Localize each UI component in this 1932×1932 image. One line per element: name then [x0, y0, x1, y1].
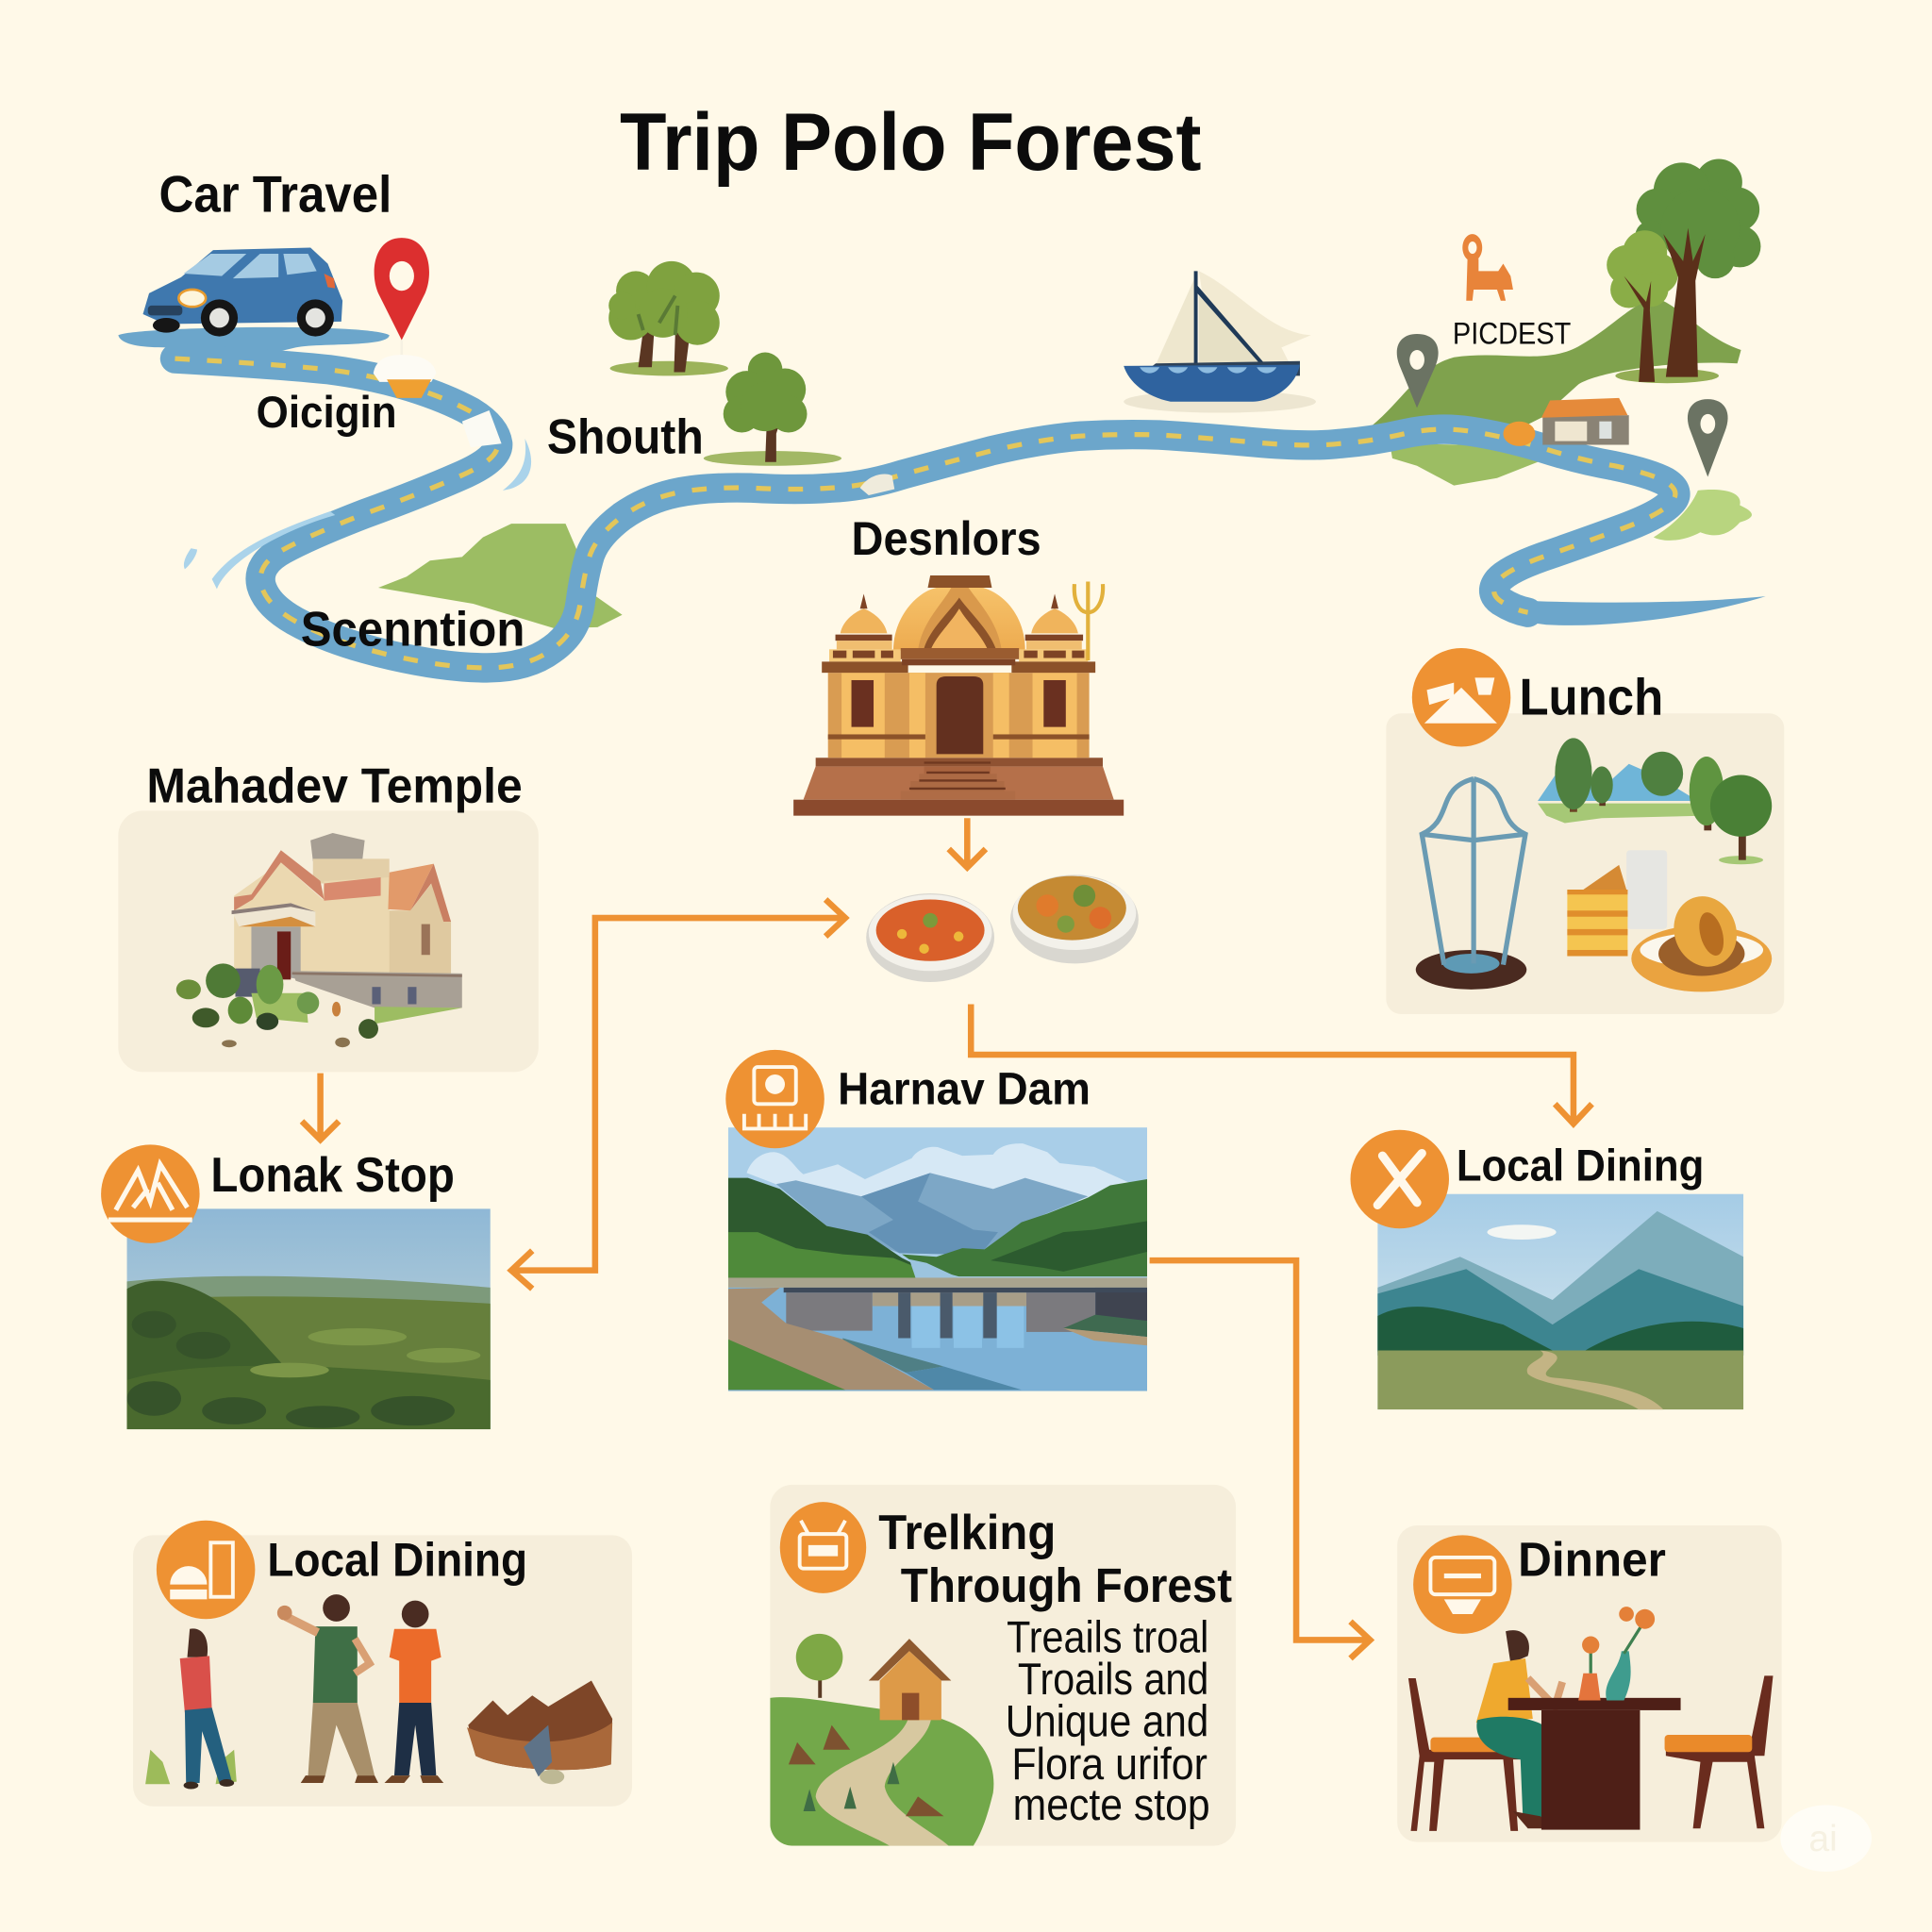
chair left — [1408, 1678, 1525, 1831]
icon: small cabin — [1541, 398, 1629, 445]
arrow: temple to food — [949, 818, 986, 868]
icon: orange mountain badge — [101, 1144, 200, 1243]
roofs — [234, 850, 325, 910]
heading: Local Dining: Local Dining — [1457, 1140, 1704, 1190]
road markers: cup, bag and bridge — [374, 340, 1535, 495]
icon: two food bowls — [866, 874, 1139, 982]
illustration: sack of rocks — [467, 1681, 612, 1784]
description text: Flora urifor — [1011, 1739, 1208, 1789]
road tail — [1497, 596, 1766, 625]
icon: orange dining badge — [157, 1521, 255, 1619]
water — [728, 1288, 1147, 1391]
title: Trip Polo Forest — [620, 97, 1201, 188]
watermark badge: ai — [1808, 1819, 1838, 1859]
side domes — [841, 608, 1078, 633]
icon: sailboat — [1124, 271, 1316, 413]
hill: light green blob — [1654, 490, 1752, 541]
trident — [1074, 581, 1103, 660]
arrow: double headed connector — [511, 899, 845, 1289]
steps — [924, 766, 991, 774]
icon: orange trek badge — [780, 1502, 866, 1593]
clouds — [747, 1143, 1132, 1201]
icon: red location pin — [375, 238, 429, 340]
person — [1506, 1630, 1529, 1663]
label: Scenntion: Scenntion — [301, 602, 525, 657]
illustration: heritage building — [176, 833, 462, 1047]
description text: Troails and — [1018, 1654, 1208, 1704]
icon: orange dam badge — [725, 1050, 824, 1148]
panel background — [1397, 1525, 1782, 1842]
dam walls — [873, 1292, 1026, 1306]
arrow: temple to Lonak Stop — [302, 1074, 339, 1140]
icon: twin trees — [608, 261, 728, 375]
illustration: hut and trail on green hill — [770, 1634, 993, 1846]
hill: right green slope — [1365, 299, 1741, 434]
road centre dashes — [175, 358, 1675, 668]
heading: Trelking Through Forest: Through Forest — [901, 1558, 1232, 1612]
chair right — [1666, 1675, 1774, 1828]
heading: Trelking Through Forest: Trelking — [878, 1506, 1056, 1560]
panel: Mahadev Temple — [118, 758, 539, 1072]
heading: Lunch: Lunch — [1519, 668, 1663, 726]
icon: single tree — [704, 353, 841, 466]
main dome — [893, 588, 1025, 651]
water swooshes — [184, 439, 531, 589]
illustration: man in orange shirt — [385, 1601, 443, 1783]
icon: orange dinner badge — [1413, 1535, 1512, 1634]
icon: right trees — [1607, 158, 1760, 383]
label: Car Travel: Car Travel — [158, 165, 391, 224]
panel: Harnav Dam — [725, 1050, 1147, 1391]
panel background — [118, 810, 539, 1072]
green hills — [728, 1177, 911, 1266]
heading: Trelking Through Forest — [878, 1506, 1232, 1612]
deck — [728, 1277, 1147, 1288]
panel: Local Dining right — [1351, 1130, 1743, 1409]
photo: blue mountains and path — [1377, 1194, 1743, 1409]
illustration: woman in red shirt — [145, 1628, 237, 1789]
label: PICDEST: PICDEST — [1453, 315, 1571, 350]
panel background — [770, 1485, 1236, 1846]
icon: orange utensils badge — [1351, 1130, 1449, 1228]
panel: Trekking Through Forest — [770, 1485, 1236, 1846]
description text — [1006, 1612, 1210, 1829]
water puddle under car — [118, 327, 390, 370]
icon: blue car — [143, 248, 342, 337]
illustration: diner at table — [1408, 1607, 1774, 1831]
arrow: dam to Dinner — [1150, 1260, 1370, 1658]
porch — [251, 922, 301, 979]
heading: Mahadev Temple: Mahadev Temple — [146, 758, 523, 813]
illustration: food spread — [1567, 850, 1772, 991]
photo: forest valley — [127, 1208, 491, 1429]
icon: orange picnic sign — [1462, 234, 1513, 301]
description text: Treails troal — [1007, 1612, 1208, 1662]
illustration: lake and trees — [1538, 738, 1772, 864]
winding road — [175, 358, 1675, 668]
icon: temple — [793, 575, 1124, 816]
shrubs — [176, 979, 201, 999]
window — [422, 924, 430, 955]
hill: lower green — [1390, 443, 1541, 486]
watermark badge — [1780, 1805, 1872, 1872]
arrow: food to Local Dining — [971, 1004, 1592, 1124]
panel background — [133, 1535, 632, 1807]
lawns — [251, 993, 462, 1024]
label: Shouth: Shouth — [547, 410, 704, 465]
photo: dam and reservoir — [728, 1127, 1147, 1391]
heading: Dinner: Dinner — [1518, 1533, 1666, 1587]
plinth — [292, 971, 462, 1008]
description text: Unique and — [1006, 1695, 1208, 1745]
panel: Dinner — [1397, 1525, 1782, 1842]
icon: orange lunch badge — [1412, 648, 1510, 747]
roof beams — [822, 661, 908, 673]
heading: Local Dining: Local Dining — [267, 1534, 527, 1587]
panel: Lonak Stop — [101, 1144, 491, 1429]
tower — [310, 833, 365, 861]
icon: glass lantern stand — [1416, 778, 1526, 990]
label: Oicigin: Oicigin — [257, 387, 397, 437]
illustration: man in green vest — [277, 1594, 378, 1783]
route map — [118, 158, 1766, 668]
label: Desnlors: Desnlors — [852, 512, 1041, 565]
hill: left green mountain — [378, 524, 623, 628]
icon: grey pin left — [1397, 334, 1439, 408]
heading: Harnav Dam: Harnav Dam — [838, 1063, 1091, 1114]
panel: Lunch — [1386, 648, 1784, 1014]
bank — [728, 1288, 934, 1390]
heading: Lonak Stop: Lonak Stop — [210, 1148, 455, 1203]
blue mountains — [776, 1173, 1088, 1255]
icon: grey pin right — [1688, 399, 1728, 476]
walls — [234, 862, 451, 979]
base — [804, 766, 1114, 800]
panel: Local Dining left — [133, 1521, 632, 1807]
description text: mecte stop — [1013, 1779, 1210, 1829]
flowers — [1578, 1674, 1601, 1700]
table — [1508, 1698, 1681, 1710]
walls — [828, 673, 1090, 758]
panel background — [1386, 713, 1784, 1014]
